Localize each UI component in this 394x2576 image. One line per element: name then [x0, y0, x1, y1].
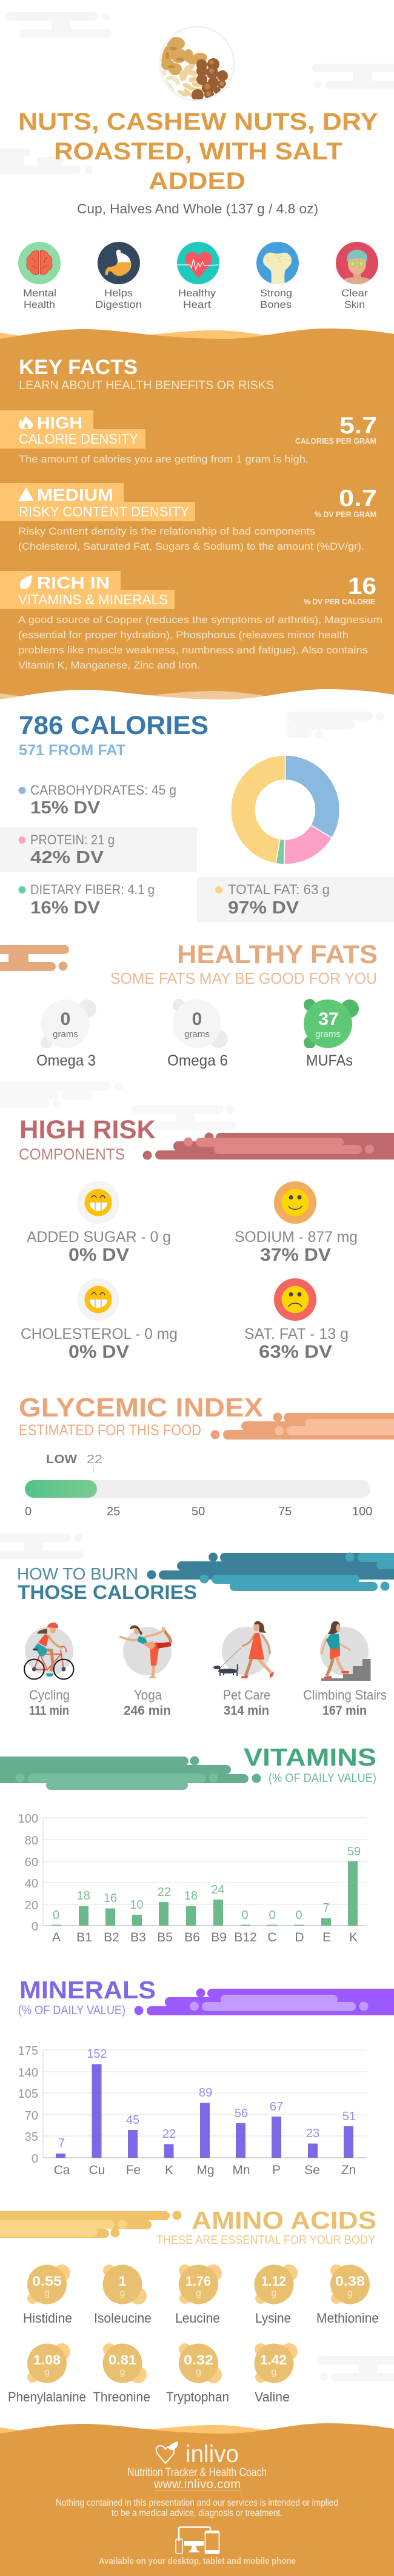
bar chart: vitamins: 40	[25, 1877, 38, 1890]
gauge	[25, 1453, 372, 1518]
amino: threonine: g	[120, 2367, 125, 2377]
fact: high calorie density: CALORIE DENSITY	[19, 431, 138, 447]
icon: digestion stomach	[95, 242, 142, 310]
item: added sugar	[27, 1181, 171, 1265]
subheading: (% OF DAILY VALUE)	[269, 1772, 376, 1785]
health benefit icons	[18, 242, 378, 310]
activity: pet care	[213, 1621, 274, 1718]
stat: total fat: TOTAL FAT: 63 g	[228, 882, 330, 897]
bar chart: vitamins: A	[52, 1930, 61, 1944]
fact: rich in vitamins and minerals: Vitamin K, Manganese, Zinc and Iron.	[18, 659, 200, 671]
title: NUTS, CASHEW NUTS, DRY	[18, 108, 378, 135]
bar chart: minerals: 45	[126, 2114, 139, 2127]
fact: rich in vitamins and minerals: VITAMINS & MINERALS	[18, 592, 168, 607]
heading: HIGH RISK	[19, 1115, 156, 1144]
bar chart: vitamins: 0	[295, 1909, 302, 1922]
badge: omega 3: 0	[61, 1009, 70, 1029]
item: saturated fat	[244, 1278, 349, 1362]
amino: tryptophan: 0.32	[184, 2352, 213, 2367]
icon: leaf	[20, 575, 32, 589]
bar chart: minerals: 22	[162, 2127, 176, 2141]
badge: omega 6: Omega 6	[167, 1052, 228, 1069]
activity: pet care: 314 min	[224, 1704, 269, 1718]
subheading: (% OF DAILY VALUE)	[18, 2004, 125, 2017]
item: added sugar: 0% DV	[68, 1245, 129, 1265]
badge: omega 6	[167, 999, 228, 1069]
stat: dietary fiber: DIETARY FIBER: 4.1 g	[30, 882, 155, 897]
icon: strong bones: Bones	[260, 299, 292, 310]
amino: histidine: g	[44, 2288, 50, 2298]
amino: tryptophan: Tryptophan	[166, 2389, 229, 2404]
icon: strong bones	[256, 242, 299, 310]
bar chart: vitamins: 0	[53, 1909, 59, 1922]
subheading: SOME FATS MAY BE GOOD FOR YOU	[110, 969, 377, 987]
bar chart: vitamins: 24	[211, 1883, 225, 1897]
item: saturated fat: SAT. FAT - 13 g	[244, 1326, 349, 1343]
amino: threonine: 0.81	[109, 2352, 136, 2367]
badge: mufas: MUFAs	[306, 1052, 353, 1069]
gauge: 50	[192, 1505, 205, 1518]
icon: mental health brain: Health	[24, 299, 55, 310]
gauge: LOW	[46, 1453, 77, 1466]
subheading: THESE ARE ESSENTIAL FOR YOUR BODY	[156, 2234, 375, 2247]
badge: omega 3: Omega 3	[36, 1052, 96, 1069]
banner	[143, 1132, 394, 1160]
fact: medium risky content density: RISKY CONTENT DENSITY	[19, 504, 189, 519]
panel: minerals	[18, 1976, 394, 2177]
icon: flame	[19, 416, 33, 429]
icon: healthy heart: Heart	[183, 299, 211, 310]
fact: medium risky content density	[0, 483, 377, 552]
stat: total fat: 97% DV	[228, 898, 299, 918]
panel: burn calories: THOSE CALORIES	[18, 1581, 197, 1603]
disclaimer: Nothing contained in this presentation and our services is intended or implied	[56, 2498, 338, 2508]
panel: key facts	[0, 329, 394, 724]
amino: valine: Valine	[255, 2389, 290, 2404]
banner	[0, 2211, 182, 2238]
stat: protein	[18, 832, 115, 867]
footer	[0, 2423, 394, 2576]
bar chart: minerals: 67	[270, 2100, 283, 2114]
amino: leucine: Leucine	[175, 2311, 220, 2326]
icon: devices	[176, 2528, 219, 2554]
fact: rich in vitamins and minerals: % DV PER CALORIE	[304, 598, 375, 606]
bar chart: vitamins: 10	[130, 1898, 144, 1912]
amino: methionine: g	[347, 2288, 353, 2298]
bar chart: vitamins: 16	[104, 1892, 117, 1905]
stat: carbohydrates: CARBOHYDRATES: 45 g	[30, 782, 176, 798]
banner	[0, 1757, 261, 1790]
badge: omega 3	[36, 999, 96, 1069]
badge: mufas: grams	[315, 1029, 341, 1039]
amino: histidine	[23, 2264, 72, 2326]
fact: high calorie density: HIGH	[37, 413, 82, 432]
bar chart: minerals: K	[165, 2163, 173, 2177]
gauge: 0	[25, 1505, 32, 1518]
stat: protein: PROTEIN: 21 g	[30, 832, 115, 847]
activity: climbing stairs: Climbing Stairs	[303, 1687, 387, 1703]
amino: lysine: Lysine	[255, 2311, 291, 2326]
bar chart: vitamins: D	[295, 1930, 304, 1944]
bar chart: minerals	[18, 2044, 367, 2177]
fact: high calorie density: The amount of calories you are getting from 1 gram is high.	[19, 453, 309, 465]
amino: histidine: Histidine	[23, 2311, 72, 2326]
bar chart: minerals: 51	[342, 2110, 356, 2123]
title	[18, 108, 378, 195]
bar chart: vitamins: E	[322, 1930, 331, 1944]
icon: healthy heart	[177, 242, 219, 310]
bar chart: vitamins: B2	[104, 1930, 119, 1944]
activity: climbing stairs: 167 min	[322, 1704, 367, 1718]
heading: key facts: KEY FACTS	[19, 356, 138, 379]
image: bowl of mixed nuts	[160, 27, 234, 101]
fact: rich in vitamins and minerals: RICH IN	[37, 573, 110, 592]
bar chart: vitamins: B3	[130, 1930, 146, 1944]
stat: dietary fiber: 16% DV	[30, 898, 101, 918]
activity: cycling	[24, 1623, 73, 1718]
logo: inlivo: inlivo	[185, 2441, 239, 2468]
bar chart: vitamins: B12	[234, 1930, 257, 1944]
badge: mufas	[304, 999, 359, 1069]
gauge: 22	[87, 1453, 102, 1466]
bar chart: vitamins	[18, 1812, 367, 1944]
subheading: from fat: 571 FROM FAT	[19, 742, 125, 759]
fact: rich in vitamins and minerals: A good source of Copper (reduces the symptoms of arthritis), Magnesium	[18, 614, 382, 626]
amino: phenylalanine: 1.08	[33, 2352, 61, 2367]
icon: digestion stomach: Digestion	[95, 299, 142, 310]
fact: medium risky content density: Risky Content density is the relationship of bad components	[18, 526, 315, 537]
bar chart: minerals: P	[272, 2163, 281, 2177]
icon: digestion stomach: Helps	[104, 287, 133, 299]
panel: high risk components	[19, 1115, 394, 1362]
bar chart: minerals: 0	[32, 2152, 38, 2166]
item: sodium	[235, 1181, 358, 1265]
heading: VITAMINS	[244, 1743, 376, 1771]
amino: tryptophan: g	[196, 2367, 201, 2377]
bar chart: minerals: 70	[25, 2109, 38, 2123]
heading: AMINO ACIDS	[192, 2206, 376, 2234]
stat: dietary fiber	[18, 882, 155, 918]
amino: phenylalanine: Phenylalanine	[8, 2389, 86, 2404]
item: cholesterol: CHOLESTEROL - 0 mg	[21, 1326, 178, 1343]
bar chart: vitamins: 0	[32, 1920, 38, 1934]
amino: threonine: Threonine	[93, 2389, 150, 2404]
badge: omega 3: grams	[53, 1029, 78, 1039]
item: added sugar: ADDED SUGAR - 0 g	[27, 1229, 171, 1246]
amino: phenylalanine: g	[44, 2367, 50, 2377]
panel: glycemic index	[19, 1393, 394, 1518]
gauge: 25	[107, 1505, 120, 1518]
icon: clear skin: Clear	[341, 287, 368, 299]
amino: isoleucine: g	[120, 2288, 125, 2298]
activity: pet care: Pet Care	[223, 1687, 270, 1703]
activity: yoga: 246 min	[124, 1704, 171, 1718]
activity: climbing stairs	[303, 1621, 387, 1718]
amino: leucine: 1.76	[185, 2274, 211, 2289]
disclaimer: to be a medical advice, diagnosis or treatment.	[112, 2508, 282, 2518]
item: sodium: SODIUM - 877 mg	[235, 1229, 358, 1246]
amino: valine: g	[272, 2367, 276, 2377]
bar chart: minerals: 140	[18, 2066, 38, 2080]
subheading: COMPONENTS	[19, 1145, 125, 1163]
heading: HEALTHY FATS	[177, 940, 378, 969]
badge: omega 6: 0	[192, 1009, 202, 1029]
icon: strong bones: Strong	[260, 287, 292, 299]
title: ROASTED, WITH SALT	[54, 138, 342, 165]
amino: isoleucine: 1	[119, 2274, 126, 2289]
banner	[147, 1553, 394, 1591]
amino: valine	[255, 2343, 298, 2404]
badge: omega 6: grams	[184, 1029, 210, 1039]
banner	[135, 1988, 394, 2015]
bar chart: minerals: Ca	[54, 2163, 70, 2177]
subheading: ESTIMATED FOR THIS FOOD	[19, 1422, 201, 1439]
gauge: 100	[352, 1505, 372, 1518]
activity: cycling: Cycling	[29, 1687, 70, 1703]
donut chart	[231, 755, 339, 864]
bar chart: vitamins: 100	[18, 1812, 38, 1826]
activity: cycling: 111 min	[29, 1704, 69, 1718]
amino: tryptophan	[166, 2343, 229, 2404]
icon: clear skin: Skin	[344, 299, 365, 310]
banner	[0, 945, 69, 971]
fact: medium risky content density: MEDIUM	[37, 486, 113, 504]
gauge: 75	[278, 1505, 292, 1518]
bar chart: vitamins: 7	[322, 1901, 330, 1915]
panel: vitamins	[0, 1743, 376, 1944]
stat: protein: 42% DV	[30, 848, 104, 867]
bar chart: minerals: 152	[87, 2047, 107, 2061]
activity: yoga: Yoga	[134, 1687, 162, 1703]
amino: phenylalanine	[8, 2343, 86, 2404]
banner	[211, 1412, 394, 1440]
bar chart: minerals: 23	[306, 2127, 319, 2140]
bar chart: vitamins: 60	[25, 1856, 38, 1869]
bar chart: minerals: Cu	[89, 2163, 105, 2177]
subheading: LEARN ABOUT HEALTH BENEFITS OR RISKS	[19, 379, 274, 392]
bar chart: minerals: 105	[18, 2087, 38, 2101]
bar chart: minerals: 35	[25, 2131, 38, 2144]
fact: high calorie density: 5.7	[339, 413, 377, 439]
amino: lysine	[255, 2264, 298, 2326]
stat: total fat	[215, 882, 330, 918]
bar chart: vitamins: B5	[157, 1930, 173, 1944]
bar chart: minerals: Mg	[196, 2163, 215, 2177]
bar chart: vitamins: B1	[76, 1930, 92, 1944]
badge: mufas: 37	[318, 1009, 339, 1029]
panel: calories	[0, 711, 394, 922]
bar chart: vitamins: 59	[347, 1845, 361, 1858]
amino: methionine: 0.38	[335, 2274, 365, 2289]
fact: rich in vitamins and minerals: 16	[348, 573, 376, 599]
amino: histidine: 0.55	[32, 2274, 62, 2289]
serving size subtitle: Cup, Halves And Whole (137 g / 4.8 oz)	[77, 201, 318, 216]
logo: inlivo	[156, 2441, 239, 2468]
bar chart: minerals: Se	[304, 2163, 320, 2177]
amino: leucine	[175, 2264, 222, 2326]
icon: clear skin	[336, 242, 378, 310]
icon: warning triangle	[18, 487, 34, 501]
amino: lysine: g	[272, 2288, 276, 2298]
fact: rich in vitamins and minerals: (essential for proper hydration), Phosphorus (releaves minor health	[18, 629, 349, 641]
bar chart: vitamins: K	[349, 1930, 358, 1944]
bar chart: vitamins: 0	[241, 1909, 249, 1922]
panel: healthy fats	[0, 940, 378, 1069]
bar chart: minerals: 56	[235, 2107, 248, 2120]
amino: lysine: 1.12	[261, 2274, 286, 2289]
amino: threonine	[93, 2343, 150, 2404]
amino: leucine: g	[196, 2288, 201, 2298]
amino: isoleucine: Isoleucine	[94, 2311, 152, 2326]
icon: mental health brain: Mental	[23, 287, 56, 299]
bar chart: vitamins: 80	[25, 1834, 38, 1847]
activity: yoga	[119, 1626, 172, 1718]
bar chart: vitamins: 18	[76, 1889, 90, 1903]
heading: HOW TO BURN	[17, 1564, 138, 1583]
bar chart: vitamins: C	[267, 1930, 277, 1944]
bar chart: vitamins: 20	[25, 1899, 38, 1912]
amino: methionine: Methionine	[316, 2311, 379, 2326]
panel: amino acids	[0, 2206, 379, 2404]
bar chart: vitamins: 18	[184, 1889, 198, 1903]
bar chart: vitamins: 22	[158, 1886, 171, 1899]
fact: rich in vitamins and minerals: problems like muscle weakness, numbness and fatigue). Also contains	[18, 644, 368, 656]
stat: carbohydrates: 15% DV	[30, 798, 101, 818]
bar chart: vitamins: 0	[269, 1909, 276, 1922]
bar chart: minerals: Fe	[126, 2163, 141, 2177]
amino: methionine	[316, 2264, 379, 2326]
bar chart: minerals: 89	[199, 2086, 212, 2100]
bar chart: minerals: 7	[58, 2137, 65, 2150]
website link: www.inlivo.com	[153, 2478, 241, 2491]
bar chart: minerals: 175	[18, 2044, 38, 2058]
bar chart: minerals: Zn	[341, 2163, 356, 2177]
heading: GLYCEMIC INDEX	[19, 1393, 263, 1423]
fact: high calorie density	[0, 410, 377, 465]
heading: MINERALS	[19, 1976, 156, 2004]
fact: medium risky content density: 0.7	[339, 486, 377, 512]
item: sodium: 37% DV	[260, 1245, 331, 1265]
bar chart: vitamins: B9	[211, 1930, 227, 1944]
item: cholesterol	[21, 1278, 178, 1362]
availability note: Available on your desktop, tablet and mobile phone	[99, 2556, 296, 2566]
fact: medium risky content density: % DV PER GRAM	[315, 510, 376, 519]
icon: healthy heart: Healthy	[178, 287, 216, 299]
stat: carbohydrates	[18, 782, 176, 818]
disclaimer	[56, 2498, 338, 2518]
panel: burn calories	[17, 1553, 394, 1718]
fact: medium risky content density: (Cholesterol, Saturated Fat, Sugars & Sodium) to the amount (%DV/gr).	[18, 541, 364, 552]
heading: 786 calories: 786 CALORIES	[19, 711, 209, 740]
fact: high calorie density: CALORIES PER GRAM	[295, 437, 376, 445]
amino: valine: 1.42	[260, 2352, 287, 2367]
icon: mental health brain	[18, 242, 61, 310]
amino: isoleucine	[94, 2264, 152, 2326]
bar chart: vitamins: B6	[184, 1930, 200, 1944]
item: cholesterol: 0% DV	[68, 1342, 129, 1362]
tagline: Nutrition Tracker & Health Coach	[127, 2466, 267, 2479]
bar chart: minerals: Mn	[232, 2163, 250, 2177]
title: ADDED	[149, 168, 245, 195]
fact: rich in vitamins and minerals	[0, 571, 382, 671]
item: saturated fat: 63% DV	[259, 1342, 332, 1362]
